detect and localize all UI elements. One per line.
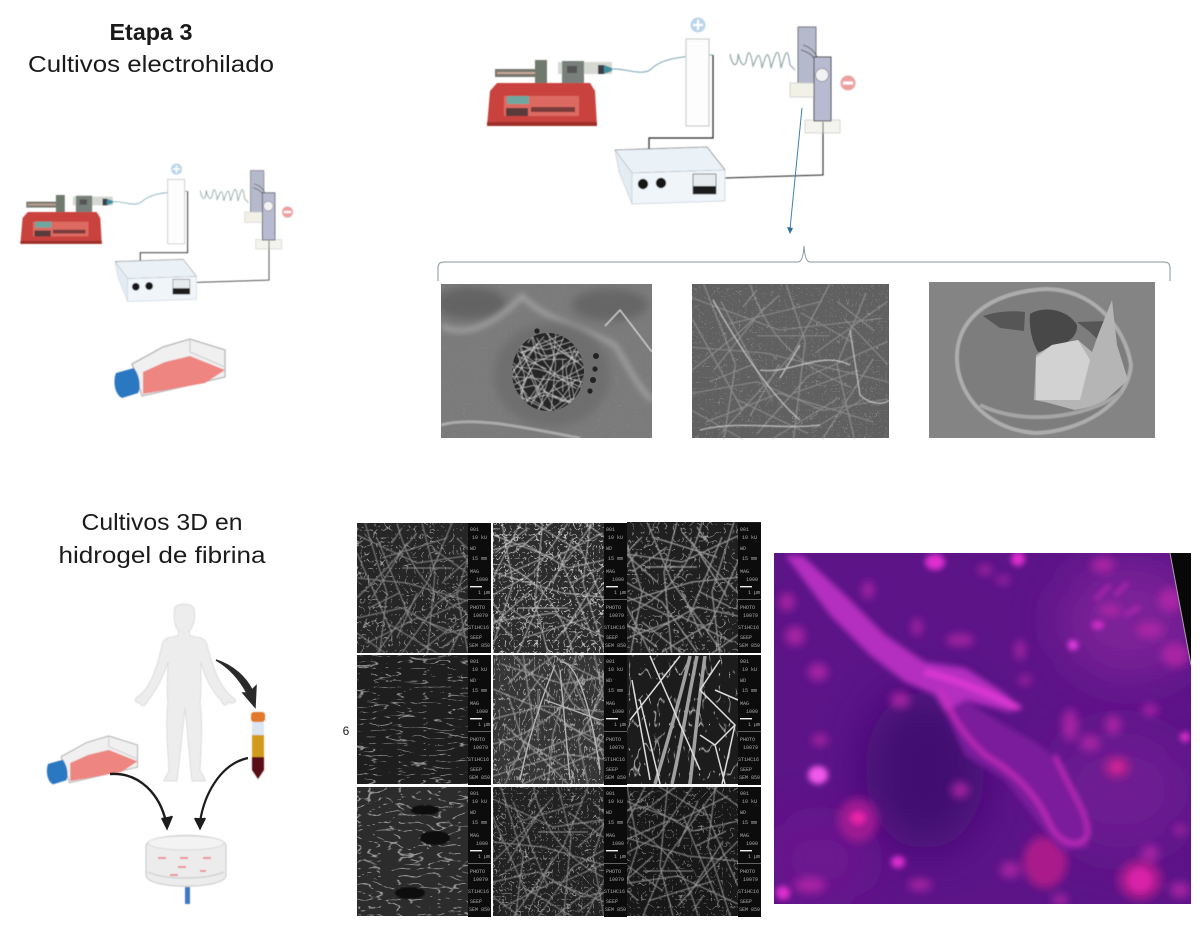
title: Etapa 3: Etapa 3 [110, 19, 192, 45]
icon: hydrogel dish [146, 836, 226, 904]
image: SEM micrograph of scaffold ring [929, 282, 1155, 438]
panel r3c3 [603, 781, 761, 917]
image: SEM micrograph with fibre patch [434, 284, 652, 438]
panel r2c3 [627, 655, 761, 785]
arrow: from blood tube to hydrogel [195, 758, 248, 828]
image: fluorescence micrograph in magenta [770, 552, 1200, 906]
panel r2c1 [357, 655, 491, 785]
arrow: from person to blood tube [216, 660, 256, 707]
image grid: fibrin SEM micrographs [357, 518, 761, 922]
arrow: from flask to hydrogel [110, 774, 172, 828]
diagram: large electrospinning setup [487, 18, 856, 204]
heading: Cultivos 3D en hidrogel de fibrina: Cultivos 3D en [82, 509, 242, 535]
panel r2c2 [493, 649, 628, 785]
image: SEM micrograph of fibre mat [692, 284, 889, 439]
panel r1c3 [607, 522, 761, 657]
heading: Cultivos 3D en hidrogel de fibrina [58, 509, 266, 568]
arrow: from collector to micrographs [787, 108, 802, 234]
heading: Cultivos 3D en hidrogel de fibrina: hidrogel de fibrina [58, 542, 266, 568]
icon: blood tube [251, 712, 265, 779]
panel r3c2 [493, 787, 628, 922]
panel r1c1 [357, 523, 492, 658]
subtitle: Cultivos electrohilado: Cultivos electrohilado [28, 51, 274, 77]
panel r1c2 [478, 518, 627, 653]
label: stray digit: 6 [343, 724, 350, 738]
icon: culture flask, lower [47, 736, 138, 784]
panel r3c1 [357, 787, 491, 917]
icon: culture flask [114, 339, 225, 398]
icon: human body [135, 604, 235, 781]
bracket above micrographs [438, 246, 1170, 281]
diagram: small electrospinning setup [20, 164, 293, 302]
